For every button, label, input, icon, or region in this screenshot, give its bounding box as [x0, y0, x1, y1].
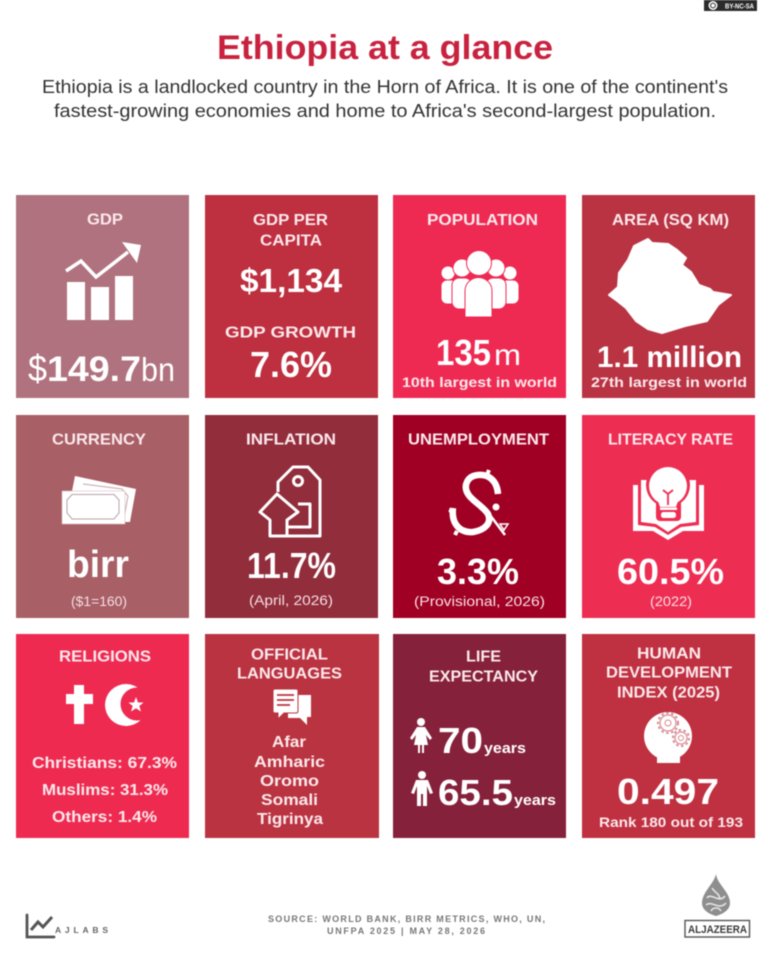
- panel: currency: CURRENCY: [52, 432, 147, 448]
- panel: literacy rate: 60.5%: [617, 551, 724, 592]
- panel: area: 27th largest in world: [591, 374, 747, 390]
- panel: currency: [16, 415, 189, 618]
- panel: human development index: HUMAN: [637, 646, 701, 662]
- panel: religions: Muslims: 31.3%: [42, 782, 168, 799]
- panel: GDP per capita and growth: $1,134: [240, 262, 343, 299]
- panel: GDP per capita and growth: 7.6%: [250, 344, 332, 385]
- subtitle text block: Ethiopia is a landlocked country in the Horn of Africa. It is one of the continent's: [42, 76, 728, 97]
- icon: group of people: [441, 250, 519, 317]
- icon: open book with light bulb: [633, 463, 704, 540]
- value: population: m: [494, 339, 521, 372]
- panel: official languages: Tigrinya: [257, 811, 323, 828]
- panel: life expectancy: years: [514, 792, 556, 809]
- panel: human development index: Rank 180 out of 193: [599, 814, 743, 830]
- panel: area: AREA (SQ KM): [612, 212, 729, 229]
- icon: price tag with up arrow: [260, 467, 320, 536]
- panel: literacy rate: (2022): [650, 594, 692, 609]
- panel: official languages: LANGUAGES: [237, 666, 342, 682]
- panel: literacy rate: LITERACY RATE: [608, 432, 733, 448]
- panel: life expectancy: 70: [438, 720, 483, 761]
- panel: GDP per capita and growth: CAPITA: [260, 232, 322, 250]
- panel: GDP per capita and growth: GDP GROWTH: [225, 324, 356, 342]
- value: population: 135: [436, 332, 491, 373]
- icon: cross: [66, 685, 93, 724]
- icon: crescent and star: [105, 684, 154, 726]
- panel: area: [582, 195, 755, 398]
- panel: GDP: GDP: [87, 212, 123, 228]
- panel: currency: ($1=160): [71, 594, 127, 609]
- panel: population: [393, 195, 566, 398]
- panel: religions: [16, 634, 189, 838]
- panel: inflation: [205, 415, 378, 618]
- panel: inflation: 11.7%: [247, 545, 336, 586]
- panel: unemployment: UNEMPLOYMENT: [408, 432, 550, 448]
- panel: life expectancy: LIFE: [466, 648, 501, 666]
- source text block: [268, 914, 545, 936]
- panel: population: 10th largest in world: [402, 374, 557, 390]
- panel: GDP per capita and growth: GDP PER: [253, 212, 328, 229]
- panel: unemployment: [393, 415, 566, 618]
- panel: human development index: 0.497: [617, 771, 719, 812]
- panel: life expectancy: [393, 634, 566, 838]
- panel: human development index: INDEX (2025): [617, 684, 720, 702]
- panel: official languages: Somali: [261, 792, 318, 809]
- panel: life expectancy: EXPECTANCY: [429, 668, 539, 686]
- panel: official languages: Amharic: [254, 754, 325, 771]
- subtitle text block: [42, 76, 728, 121]
- panel: literacy rate: [582, 415, 755, 618]
- panel: life expectancy: 65.5: [438, 772, 513, 813]
- value: GDP: bn: [141, 351, 175, 388]
- icon: speech bubbles: [273, 689, 311, 725]
- panel: human development index: [582, 634, 755, 838]
- licence badge: CC BY-NC-SA: [704, 0, 757, 11]
- title: Ethiopia at a glance: [217, 29, 553, 67]
- panel: unemployment: 3.3%: [437, 551, 519, 592]
- panel: official languages: [205, 634, 379, 838]
- panel: religions: Christians: 67.3%: [32, 755, 177, 772]
- panel: religions: RELIGIONS: [59, 648, 151, 666]
- source text block: UNFPA 2025 | MAY 28, 2026: [327, 926, 485, 936]
- source text block: SOURCE: WORLD BANK, BIRR METRICS, WHO, UN,: [268, 914, 545, 924]
- panel: inflation: (April, 2026): [249, 593, 333, 608]
- value: GDP: [28, 348, 175, 389]
- panel: inflation: INFLATION: [246, 432, 336, 448]
- panel: unemployment: (Provisional, 2026): [414, 594, 545, 609]
- logo: Al Jazeera: [685, 874, 750, 937]
- subtitle text block: fastest-growing economies and home to Africa's second-largest population.: [54, 100, 716, 121]
- panel: life expectancy: years: [484, 740, 526, 757]
- icon: woman: [410, 718, 432, 753]
- icon: man: [411, 771, 433, 806]
- icon: head with gears: [644, 712, 692, 763]
- logo: AJLABS: AJLABS: [55, 925, 108, 935]
- logo: AJLABS: [27, 915, 108, 937]
- panel: religions: Others: 1.4%: [52, 809, 157, 826]
- licence badge: CC BY-NC-SA: BY-NC-SA: [725, 2, 754, 10]
- panel: GDP per capita and growth: [205, 195, 378, 398]
- logo: Al Jazeera: ALJAZEERA: [688, 924, 747, 936]
- value: GDP: 149.7: [47, 350, 141, 389]
- panel: currency: birr: [67, 544, 129, 586]
- icon: rising bar chart with arrow: [66, 242, 141, 320]
- panel: area: 1.1 million: [597, 341, 742, 374]
- panel: GDP: [16, 195, 189, 398]
- icon: banknotes: [62, 476, 136, 524]
- panel: official languages: Afar: [272, 734, 306, 751]
- icon: dollar sign of gears with person: [449, 470, 508, 535]
- panel: human development index: DEVELOPMENT: [606, 664, 733, 682]
- panel: population: POPULATION: [427, 212, 538, 229]
- panel: official languages: Oromo: [260, 773, 319, 790]
- panel: official languages: OFFICIAL: [251, 646, 328, 664]
- icon: map of Ethiopia: [609, 239, 731, 333]
- value: GDP: $: [28, 348, 47, 389]
